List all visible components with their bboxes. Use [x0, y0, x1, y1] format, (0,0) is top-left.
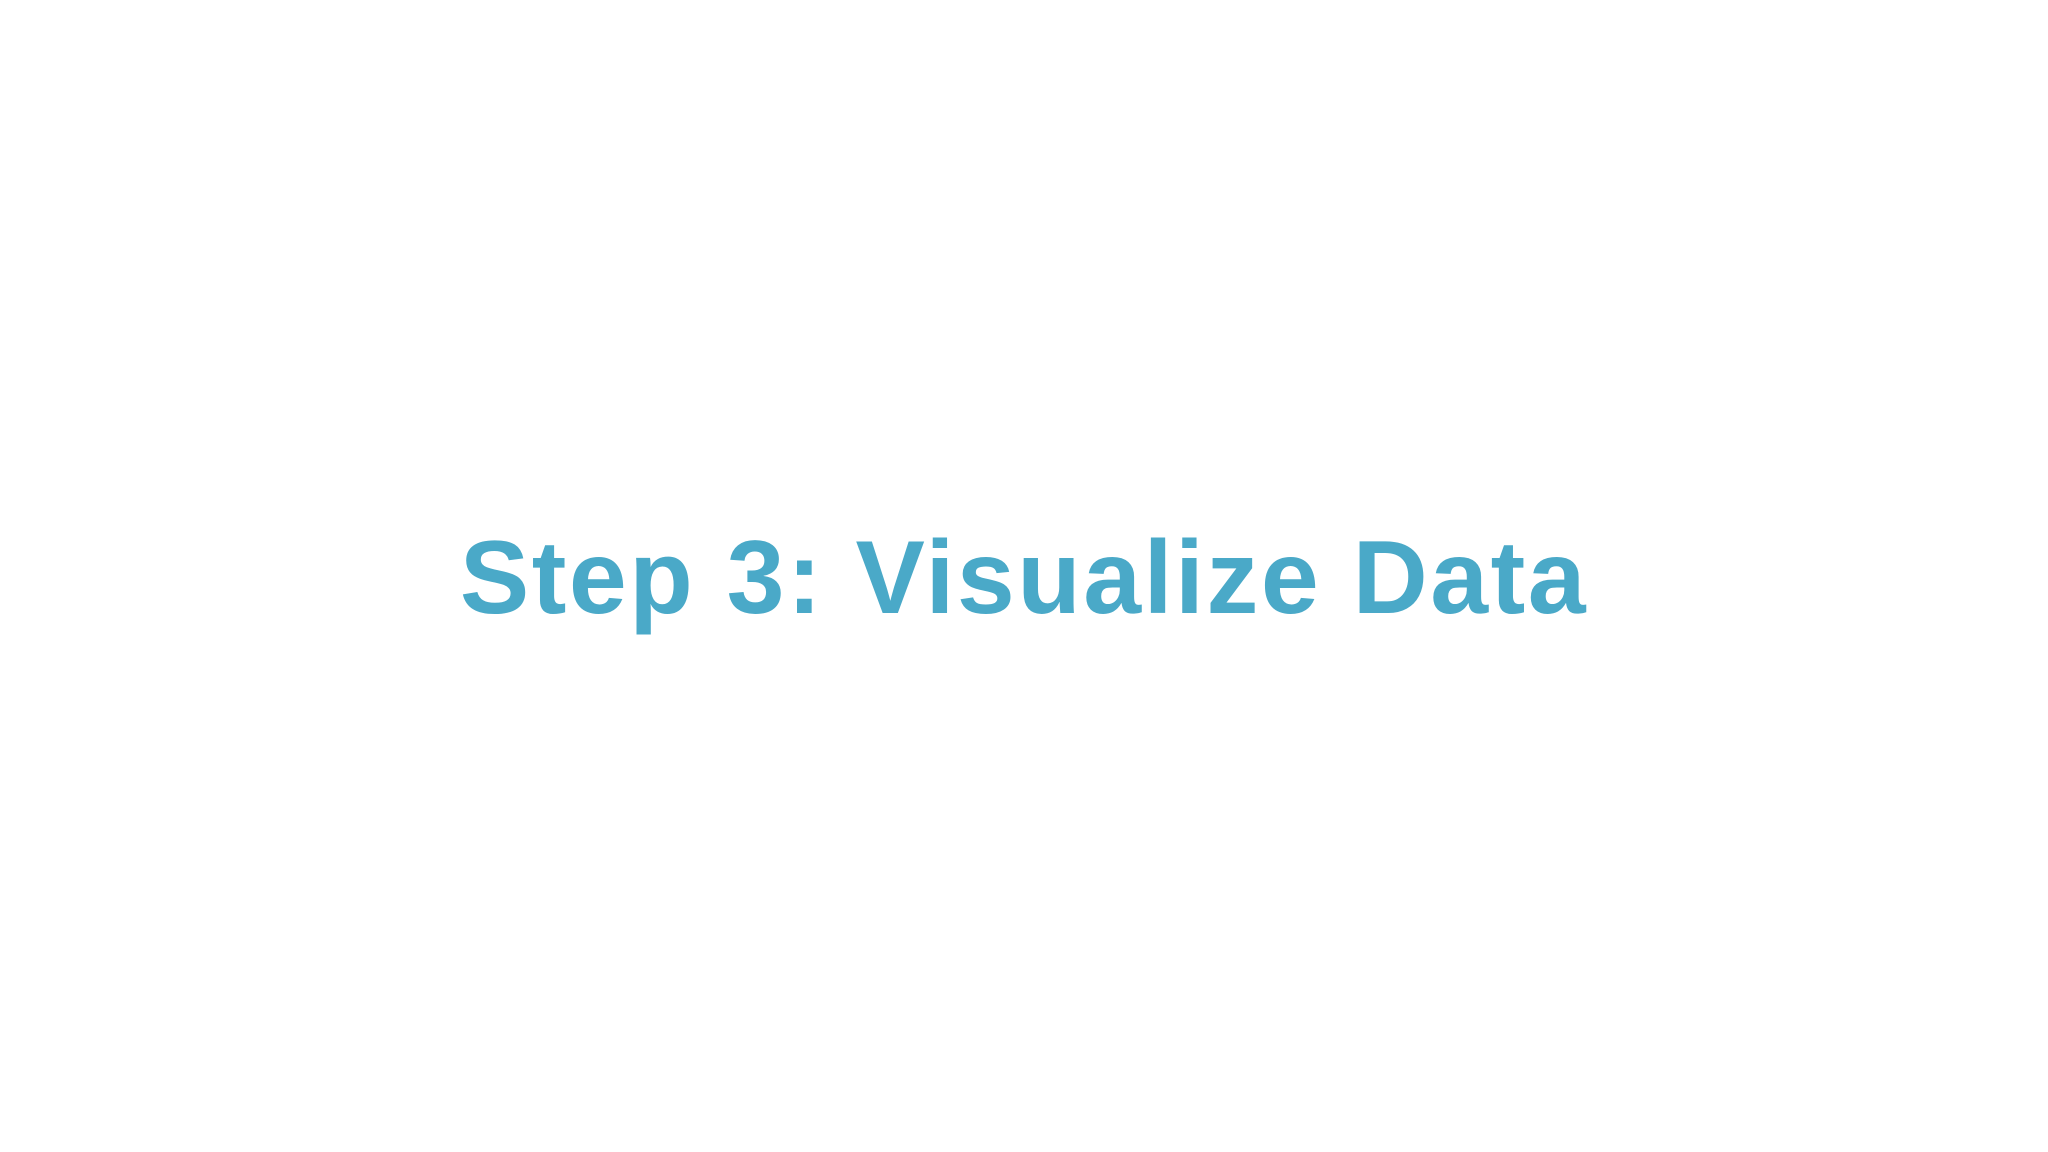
title: Step 3: Visualize Data — [460, 520, 1588, 636]
